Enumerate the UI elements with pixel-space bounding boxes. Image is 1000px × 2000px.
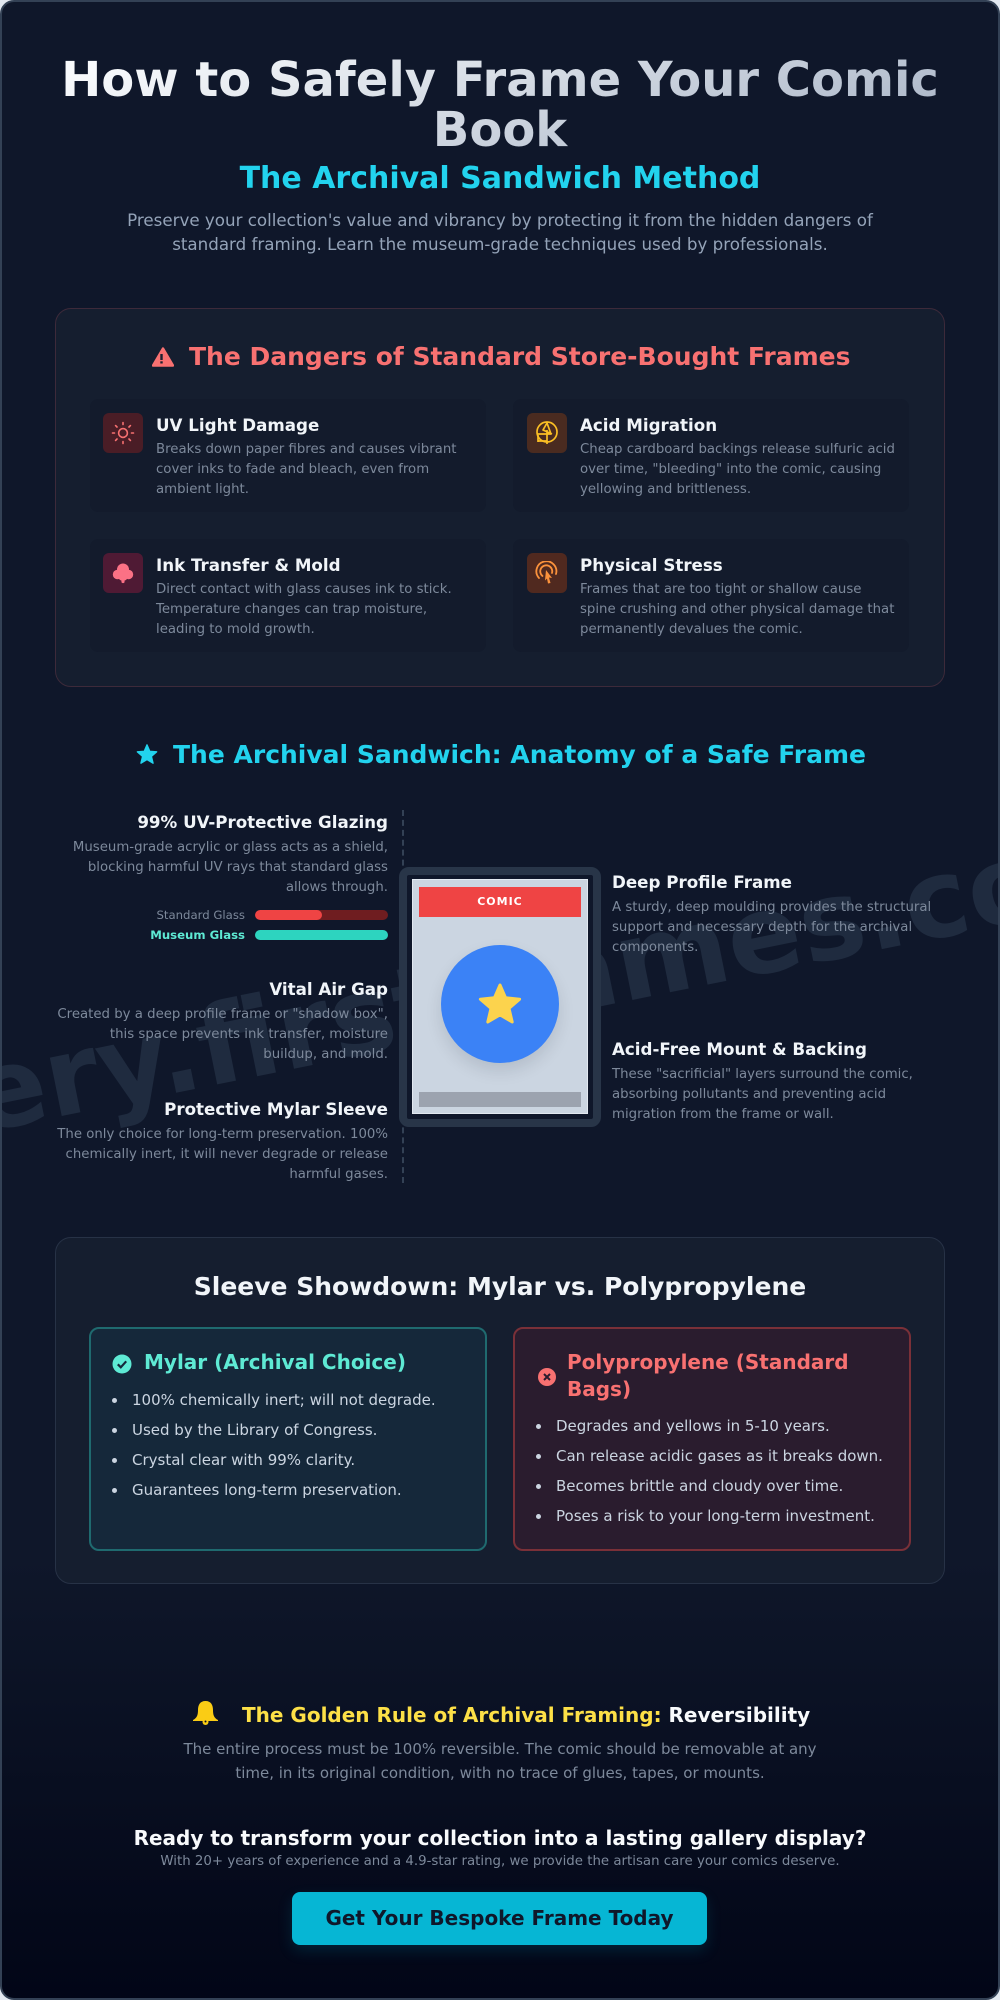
icon: bell xyxy=(193,1701,218,1725)
mylar list: 100% chemically inert; will not degrade. xyxy=(132,1391,436,1409)
title xyxy=(0,55,1000,155)
label: UV glazing xyxy=(73,812,388,895)
label: acid-free mount: absorbing pollutants and preventing acid xyxy=(612,1087,886,1102)
card: ink transfer and mold: Direct contact with glass causes ink to stick. xyxy=(156,582,452,597)
title: Book xyxy=(433,102,567,158)
icon: cloud xyxy=(103,553,143,593)
card: acid migration: Acid Migration xyxy=(580,414,717,434)
intro text: Preserve your collection's value and vibrancy by protecting it from the hidden dangers of xyxy=(127,210,873,230)
label: acid-free mount: migration from the frame or wall. xyxy=(612,1107,834,1122)
card: ink transfer and mold: Temperature changes can trap moisture, xyxy=(156,602,427,617)
label: air gap: Created by a deep profile frame or "shadow box", xyxy=(57,1007,388,1022)
mylar list xyxy=(112,1391,436,1499)
icon: sun xyxy=(103,413,143,453)
golden rule body xyxy=(183,1740,817,1782)
panel: dangers xyxy=(55,308,945,687)
polypropylene title: Bags) xyxy=(567,1377,631,1401)
label: acid-free mount xyxy=(612,1039,913,1122)
blue circle with star xyxy=(441,945,559,1063)
polypropylene list xyxy=(536,1417,883,1525)
heading: dangers xyxy=(152,342,850,371)
label: air gap: Vital Air Gap xyxy=(269,979,388,999)
card: ink transfer and mold: leading to mold growth. xyxy=(156,622,315,637)
card: UV light damage: ambient light. xyxy=(156,482,249,497)
card: mylar xyxy=(89,1327,487,1551)
label: UV glazing: Museum-grade acrylic or glass acts as a shield, xyxy=(73,840,388,855)
label: UV glazing: 99% UV-Protective Glazing xyxy=(137,812,388,832)
heading text: The Dangers of Standard Store-Bought Frames xyxy=(189,342,850,371)
label: mylar sleeve: harmful gases. xyxy=(289,1167,388,1182)
label: deep profile frame: Deep Profile Frame xyxy=(612,872,792,892)
CTA subtext: With 20+ years of experience and a 4.9-star rating, we provide the artisan care your comics deserve. xyxy=(160,1854,840,1869)
comic cover xyxy=(412,879,588,1114)
CTA button: Get Your Bespoke Frame Today xyxy=(325,1906,674,1930)
label: mylar sleeve xyxy=(57,1099,388,1182)
polypropylene list: Can release acidic gases as it breaks down. xyxy=(556,1447,883,1465)
icon: check xyxy=(112,1354,132,1374)
mylar list: Crystal clear with 99% clarity. xyxy=(132,1451,355,1469)
card: physical stress: Frames that are too tight or shallow cause xyxy=(580,582,861,597)
card: physical stress xyxy=(513,539,909,652)
card: physical stress: permanently devalues the comic. xyxy=(580,622,803,637)
comic footer bar xyxy=(419,1092,581,1107)
label: mylar sleeve: chemically inert, it will never degrade or release xyxy=(66,1147,388,1162)
polypropylene list: Degrades and yellows in 5-10 years. xyxy=(556,1417,830,1435)
golden rule body: time, in its original condition, with no trace of glues, tapes, or mounts. xyxy=(235,1764,765,1782)
card: acid migration: over time, "bleeding" into the comic, causing xyxy=(580,462,881,477)
card: UV light damage: Breaks down paper fibres and causes vibrant xyxy=(156,442,456,457)
label: air gap: buildup, and mold. xyxy=(263,1047,388,1062)
panel: sleeve showdown xyxy=(55,1237,945,1584)
dashed guide line xyxy=(402,810,404,1183)
card: physical stress: Physical Stress xyxy=(580,554,723,574)
golden rule body: The entire process must be 100% reversible. The comic should be removable at any xyxy=(183,1740,817,1758)
bar chart: glass comparison xyxy=(150,908,388,942)
bar: standard glass: Standard Glass xyxy=(156,908,245,922)
mylar title: Mylar (Archival Choice) xyxy=(144,1350,406,1374)
card: acid migration xyxy=(513,399,909,512)
golden rule text: The Golden Rule of Archival Framing: Reversibility xyxy=(242,1703,810,1727)
golden rule heading xyxy=(193,1701,810,1727)
CTA button xyxy=(292,1892,707,1945)
card: ink transfer and mold xyxy=(90,539,486,652)
label: UV glazing: allows through. xyxy=(286,880,388,895)
label: deep profile frame xyxy=(612,872,931,955)
label: air gap: this space prevents ink transfer, moisture xyxy=(110,1027,388,1042)
diagram: framed comic xyxy=(399,867,601,1127)
title: How to Safely Frame Your Comic xyxy=(61,52,939,108)
polypropylene title: Polypropylene (Standard xyxy=(567,1350,849,1374)
CTA heading: Ready to transform your collection into a lasting gallery display? xyxy=(134,1826,866,1850)
card: polypropylene xyxy=(513,1327,911,1551)
icon: cross xyxy=(538,1368,556,1386)
card: acid migration: Cheap cardboard backings release sulfuric acid xyxy=(580,442,895,457)
comic header: COMIC xyxy=(477,895,523,908)
heading: showdown: Sleeve Showdown: Mylar vs. Polypropylene xyxy=(194,1272,806,1301)
mylar list: Guarantees long-term preservation. xyxy=(132,1481,402,1499)
heading text: The Archival Sandwich: Anatomy of a Safe Frame xyxy=(173,740,866,769)
label: acid-free mount: Acid-Free Mount & Backing xyxy=(612,1039,867,1059)
label: acid-free mount: These "sacrificial" layers surround the comic, xyxy=(612,1067,913,1082)
label: deep profile frame: A sturdy, deep moulding provides the structural xyxy=(612,900,931,915)
card: UV light damage: UV Light Damage xyxy=(156,414,319,434)
card: physical stress: spine crushing and other physical damage that xyxy=(580,602,894,617)
icon: acid xyxy=(527,413,567,453)
bar: museum glass: Museum Glass xyxy=(150,928,245,942)
mylar list: Used by the Library of Congress. xyxy=(132,1421,377,1439)
subtitle: The Archival Sandwich Method xyxy=(240,161,760,196)
icon: star xyxy=(136,744,158,764)
polypropylene title xyxy=(567,1350,849,1401)
card: ink transfer and mold: Ink Transfer & Mold xyxy=(156,554,341,574)
icon: yellow star xyxy=(478,984,522,1024)
card: acid migration: yellowing and brittleness. xyxy=(580,482,751,497)
label: mylar sleeve: Protective Mylar Sleeve xyxy=(164,1099,388,1119)
intro text: standard framing. Learn the museum-grade techniques used by professionals. xyxy=(172,234,828,254)
card: UV light damage xyxy=(90,399,486,512)
comic header xyxy=(419,887,581,917)
card: UV light damage: cover inks to fade and bleach, even from xyxy=(156,462,429,477)
polypropylene list: Poses a risk to your long-term investment. xyxy=(556,1507,875,1525)
icon: pressure xyxy=(527,553,567,593)
heading: anatomy xyxy=(136,740,866,769)
polypropylene list: Becomes brittle and cloudy over time. xyxy=(556,1477,843,1495)
intro text xyxy=(127,210,874,254)
label: mylar sleeve: The only choice for long-term preservation. 100% xyxy=(57,1127,388,1142)
label: air gap xyxy=(57,979,388,1062)
label: deep profile frame: support and necessary depth for the archival xyxy=(612,920,912,935)
label: deep profile frame: components. xyxy=(612,940,698,955)
icon: warning triangle xyxy=(152,347,174,367)
label: UV glazing: blocking harmful UV rays that standard glass xyxy=(88,860,388,875)
